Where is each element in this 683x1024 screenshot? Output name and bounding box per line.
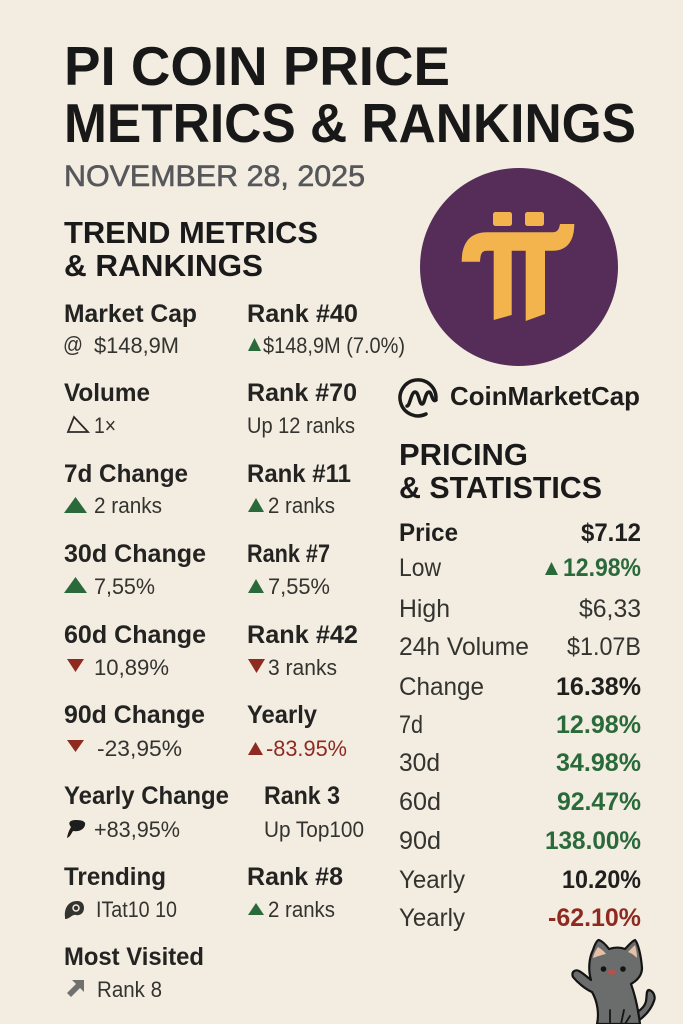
row: 7d change: 2 ranks <box>94 493 162 518</box>
row: 30d change: Rank #7 <box>247 540 330 568</box>
row: volume <box>64 379 357 438</box>
row: market cap: $148,9M (7.0%) <box>263 333 405 358</box>
row: 60d: 92.47% <box>557 788 641 816</box>
row: price: Price <box>399 519 458 547</box>
row: 60d change: 60d Change <box>64 621 206 649</box>
CoinMarketCap logo <box>400 380 640 416</box>
row: 7d change: 2 ranks <box>268 493 335 518</box>
row: 60d: 60d <box>399 788 441 816</box>
row: 60d change: 10,89% <box>94 655 169 680</box>
icon: CoinMarketCap mark <box>400 380 436 416</box>
row: yearly change: +83,95% <box>94 817 180 842</box>
row: 90d change: -23,95% <box>97 736 182 761</box>
heading: trend metrics: TREND METRICS <box>64 215 318 250</box>
title: PI COIN PRICE <box>64 35 450 97</box>
row: most visited: Most Visited <box>64 943 204 971</box>
row: market cap <box>63 300 405 358</box>
row: yearly negative <box>399 904 641 932</box>
row: low: 12.98% <box>563 554 641 582</box>
row: price: $7.12 <box>581 519 641 547</box>
title <box>64 35 636 154</box>
row: change <box>399 673 641 701</box>
row: yearly change: Rank 3 <box>264 782 340 810</box>
row: 30d change: 7,55% <box>268 574 330 599</box>
row: 7d change: 7d Change <box>64 460 188 488</box>
row: 90d change: 90d Change <box>64 701 205 729</box>
row: market cap: $148,9M <box>94 333 179 358</box>
row: high <box>399 595 641 623</box>
icon: Pi coin logo <box>420 168 618 366</box>
row: 7d: 7d <box>399 711 423 739</box>
row: trending: Trending <box>64 863 166 891</box>
row: yearly <box>399 866 641 894</box>
row: yearly negative: Yearly <box>399 904 465 932</box>
heading: pricing and statistics: & STATISTICS <box>399 470 602 505</box>
row: low <box>399 554 641 582</box>
row: 60d <box>399 788 641 816</box>
row: 24h volume: 24h Volume <box>399 633 529 661</box>
row: low: Low <box>399 554 442 582</box>
row: 30d: 34.98% <box>556 749 641 777</box>
row: 90d: 90d <box>399 827 441 855</box>
row: yearly change: Up Top100 <box>264 817 364 842</box>
row: volume: 1× <box>94 413 116 438</box>
heading: trend metrics <box>64 215 318 283</box>
row: 30d <box>399 749 641 777</box>
row: trending: Rank #8 <box>247 863 343 891</box>
row: trending <box>64 863 343 922</box>
row: yearly: Yearly <box>399 866 465 894</box>
row: 90d <box>399 827 641 855</box>
row: 60d change: 3 ranks <box>268 655 337 680</box>
row: 60d change: Rank #42 <box>247 621 358 649</box>
row: yearly: 10.20% <box>562 866 641 894</box>
panel: pricing and statistics <box>399 437 641 932</box>
row: 24h volume: $1.07B <box>567 633 641 661</box>
heading: trend metrics: & RANKINGS <box>64 248 263 283</box>
row: 7d change: Rank #11 <box>247 460 351 488</box>
row: yearly change <box>64 782 364 842</box>
row: 24h volume <box>399 633 641 661</box>
title: METRICS & RANKINGS <box>64 92 636 154</box>
row: market cap: Market Cap <box>64 300 197 328</box>
heading: pricing and statistics: PRICING <box>399 437 528 472</box>
row: volume: Up 12 ranks <box>247 413 355 438</box>
CoinMarketCap logo: CoinMarketCap <box>450 381 640 411</box>
row: 30d change: 7,55% <box>94 574 155 599</box>
date subtitle: NOVEMBER 28, 2025 <box>64 160 365 193</box>
row: yearly change: Yearly Change <box>64 782 229 810</box>
row: 7d change <box>64 460 351 518</box>
row: trending: ITat10 10 <box>96 897 177 922</box>
row: high: $6,33 <box>579 595 641 623</box>
row: 30d: 30d <box>399 749 440 777</box>
row: 30d change: 30d Change <box>64 540 206 568</box>
row: yearly negative: -62.10% <box>548 904 641 932</box>
row: market cap: Rank #40 <box>247 300 358 328</box>
row: volume: Volume <box>64 379 150 407</box>
row: 30d change <box>64 540 330 599</box>
row: 90d change: Yearly <box>247 701 317 729</box>
icon: waving cat <box>572 940 655 1024</box>
row: most visited: Rank 8 <box>97 977 162 1002</box>
row: volume: Rank #70 <box>247 379 357 407</box>
panel: trend metrics and rankings <box>63 215 405 1002</box>
row: 90d: 138.00% <box>545 827 641 855</box>
heading: pricing and statistics <box>399 437 602 505</box>
row: 90d change: -83.95% <box>266 736 347 761</box>
row: 7d: 12.98% <box>556 711 641 739</box>
row: 60d change <box>64 621 358 680</box>
row: change: 16.38% <box>556 673 641 701</box>
row: trending: 2 ranks <box>268 897 335 922</box>
row: 7d <box>399 711 641 739</box>
row: price <box>399 519 641 547</box>
row: most visited <box>64 943 204 1002</box>
row: 90d change <box>64 701 347 761</box>
row: market cap: @ <box>63 332 83 357</box>
row: high: High <box>399 595 450 623</box>
row: change: Change <box>399 673 484 701</box>
